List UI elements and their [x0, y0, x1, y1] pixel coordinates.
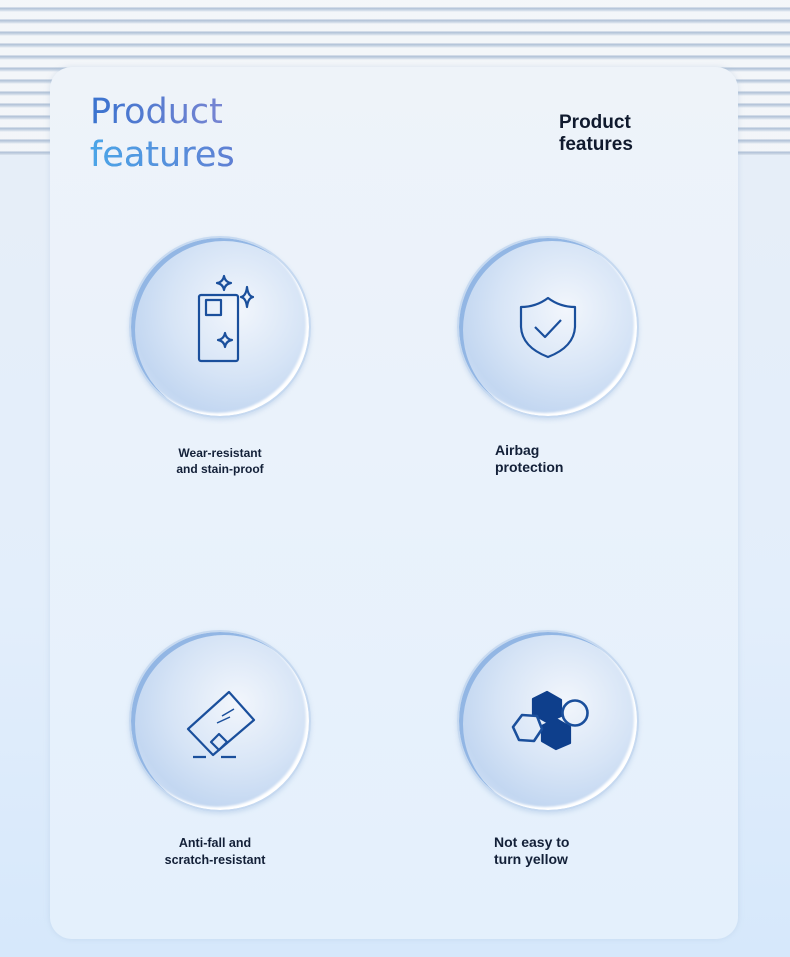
caption: anti-fall: Anti-fall and [179, 836, 251, 850]
caption: not yellow: Not easy to [494, 834, 569, 850]
icon: falling card [188, 692, 254, 757]
caption: airbag: protection [495, 459, 563, 475]
caption: not yellow [494, 834, 569, 867]
caption: wear-resistant: and stain-proof [176, 462, 264, 476]
icon: phone with sparkles [199, 276, 253, 361]
caption: airbag: Airbag [495, 442, 539, 458]
title: features [90, 135, 235, 175]
circle: airbag [457, 236, 639, 418]
caption: airbag [495, 442, 563, 475]
subtitle: features [559, 134, 633, 155]
caption: not yellow: turn yellow [494, 851, 568, 867]
icon: shield check [521, 298, 575, 357]
caption: wear-resistant [176, 446, 264, 476]
caption: wear-resistant: Wear-resistant [178, 446, 262, 460]
caption: anti-fall [165, 836, 266, 867]
subtitle: Product [559, 112, 631, 133]
circle: not yellow [457, 630, 639, 812]
caption: anti-fall: scratch-resistant [165, 853, 265, 867]
icon: hexagons [513, 692, 588, 749]
circle: wear-resistant [129, 236, 311, 418]
subtitle [559, 112, 633, 155]
title [90, 91, 235, 177]
panel: main card [50, 67, 738, 939]
circle: anti-fall [129, 630, 311, 812]
